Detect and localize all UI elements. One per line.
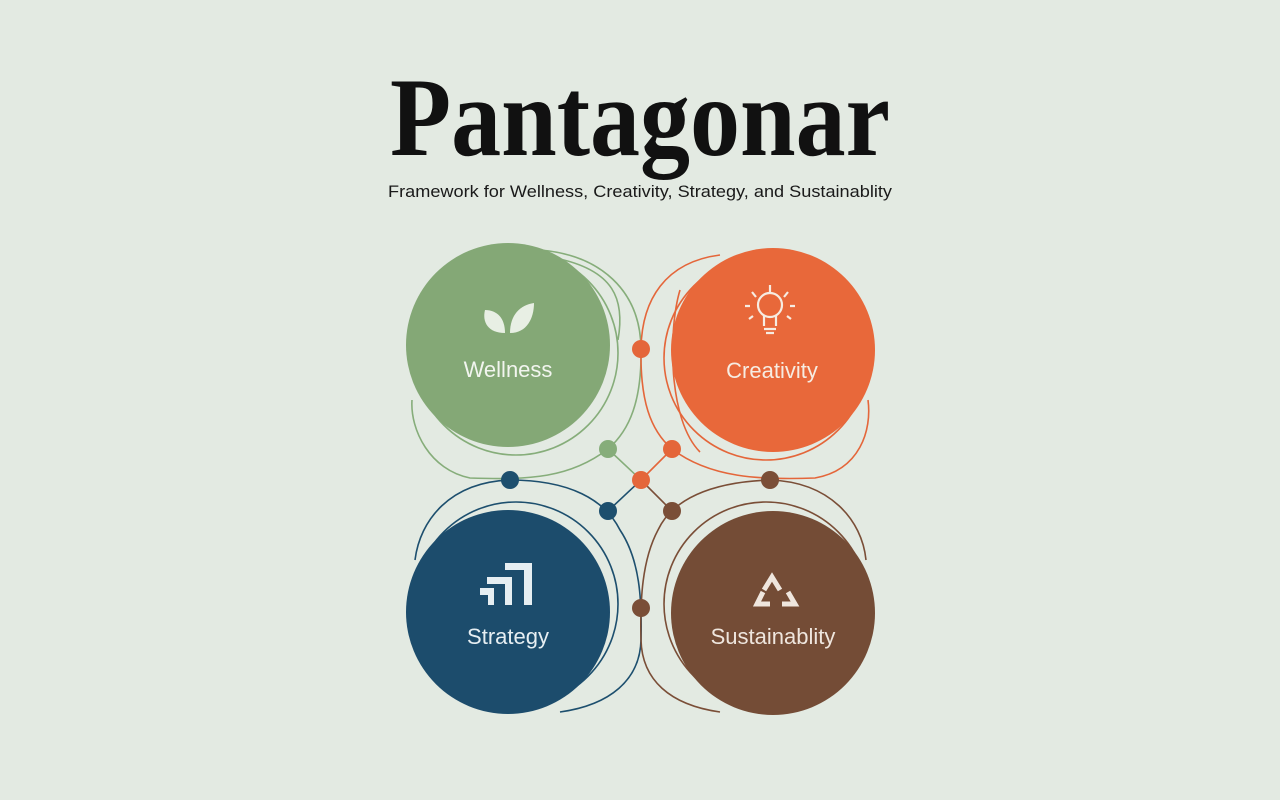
icon: recycle <box>757 577 795 604</box>
icon: light bulb <box>745 285 795 333</box>
label: Strategy: Strategy <box>467 624 549 649</box>
circle: Strategy <box>406 502 618 714</box>
connector lines <box>412 250 869 712</box>
circle: Creativity <box>664 248 875 460</box>
icon: steps <box>480 563 532 605</box>
icon: leaves <box>484 303 534 333</box>
title: Pantagonar <box>390 56 890 180</box>
circle: Wellness <box>406 243 618 455</box>
label: Sustainability: Sustainablity <box>711 624 835 649</box>
subtitle: Framework for Wellness, Creativity, Strategy, and Sustainablity <box>388 183 893 201</box>
circle: Sustainability <box>664 502 875 715</box>
label: Creativity: Creativity <box>726 358 818 383</box>
node dots <box>501 340 779 617</box>
label: Wellness: Wellness <box>464 357 552 382</box>
